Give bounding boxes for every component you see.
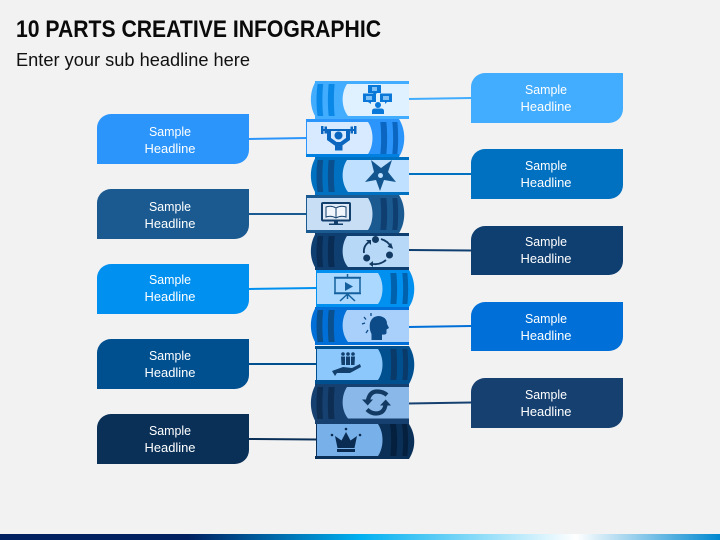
left box 2 <box>97 189 249 239</box>
right box 3 <box>471 226 623 275</box>
icon <box>362 392 391 414</box>
segment 2: weightlifter icon <box>306 119 404 157</box>
left box 4: Headline <box>144 366 196 380</box>
left box 1: Headline <box>144 142 196 156</box>
icon <box>321 126 356 150</box>
right box 4: Headline <box>520 329 572 343</box>
right box 1: Headline <box>520 100 572 114</box>
right box 5 <box>471 378 623 428</box>
left box 4 <box>97 339 249 389</box>
left box 5: Headline <box>144 441 196 455</box>
title: 10 PARTS CREATIVE INFOGRAPHIC <box>16 16 381 43</box>
icon <box>363 236 395 267</box>
right box 5: Headline <box>520 405 572 419</box>
right box 1: Sample <box>525 83 567 97</box>
right box 3: Headline <box>520 252 572 266</box>
segment 8: people on hand icon <box>315 346 414 384</box>
icon <box>334 274 361 301</box>
icon <box>362 313 389 340</box>
left box 5 <box>97 414 249 464</box>
right box 5: Sample <box>525 388 567 402</box>
right box 4 <box>471 302 623 351</box>
left box 3 <box>97 264 249 314</box>
bottom gradient band <box>0 534 720 540</box>
icon <box>363 85 392 114</box>
right box 3: Sample <box>525 235 567 249</box>
icon <box>365 160 396 191</box>
connector lines <box>249 98 471 440</box>
segment 7: head idea icon <box>311 307 409 345</box>
left box 1 <box>97 114 249 164</box>
icon <box>331 428 361 452</box>
segment 3: hands star icon <box>311 157 409 195</box>
left box 3: Headline <box>144 290 196 304</box>
subtitle: Enter your sub headline here <box>16 50 250 70</box>
segment 1: team chat icon <box>311 81 409 119</box>
left box 3: Sample <box>149 273 191 287</box>
segment 10: crown icon <box>315 424 414 459</box>
left box 1: Sample <box>149 125 191 139</box>
segment 4: monitor book icon <box>306 195 404 233</box>
segment 5: question cycle icon <box>311 233 409 270</box>
icon <box>322 203 350 225</box>
left box 5: Sample <box>149 424 191 438</box>
segment 6: presentation board icon <box>316 270 414 307</box>
left box 2: Sample <box>149 200 191 214</box>
segment 9: refresh icon <box>311 384 409 424</box>
right box 2: Headline <box>520 176 572 190</box>
right box 4: Sample <box>525 312 567 326</box>
left box 2: Headline <box>144 217 196 231</box>
right box 2: Sample <box>525 159 567 173</box>
right box 1 <box>471 73 623 123</box>
left box 4: Sample <box>149 349 191 363</box>
icon <box>332 352 361 376</box>
right box 2 <box>471 149 623 199</box>
